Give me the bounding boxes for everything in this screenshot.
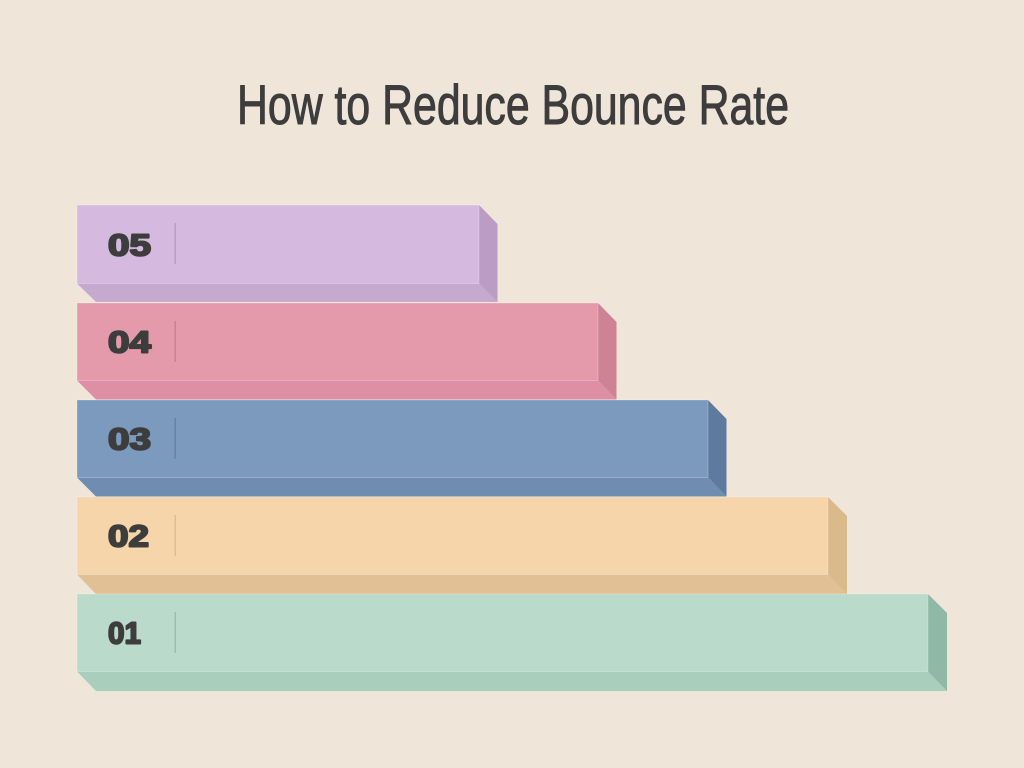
bar 05	[77, 205, 498, 302]
bar 04	[77, 303, 616, 400]
number 01: 01	[108, 616, 141, 650]
title: How to Reduce Bounce Rate	[237, 73, 789, 136]
number 03: 03	[108, 422, 151, 456]
number 02: 02	[108, 518, 149, 554]
number 04: 04	[108, 324, 152, 360]
bar 03	[77, 400, 726, 496]
bar 02	[77, 497, 847, 594]
number 05: 05	[108, 228, 151, 262]
bar 01	[77, 594, 947, 691]
